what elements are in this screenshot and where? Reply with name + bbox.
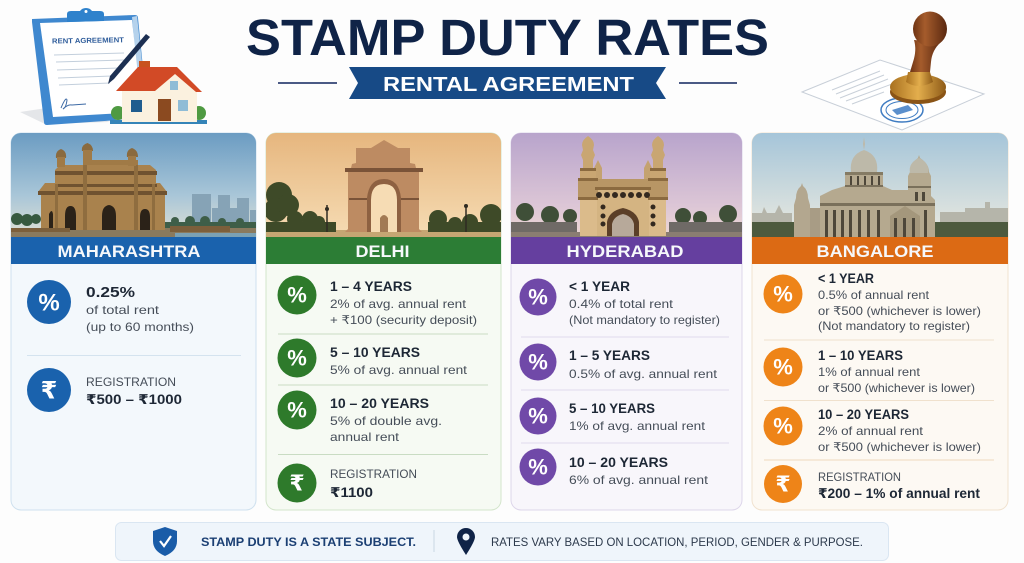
rate: 10 to 20 years: 10 – 20 YEARS	[569, 455, 668, 470]
illustration: rent agreement clipboard and house	[20, 8, 207, 125]
registration fee: Bangalore	[764, 465, 981, 503]
rate: 10 to 20 years	[520, 448, 709, 487]
panel: Hyderabad	[511, 133, 742, 510]
heading band: Delhi	[266, 237, 501, 264]
rate: 10 to 20 years: or ₹500 (whichever is lower)	[818, 440, 981, 454]
rate: 0.25% of total rent: of total rent	[86, 303, 160, 317]
rate: 1 to 10 years: 1 – 10 YEARS	[818, 348, 903, 363]
subtitle ribbon	[278, 67, 737, 99]
registration fee: Bangalore: REGISTRATION	[818, 470, 901, 484]
rate: under 1 year: < 1 YEAR	[818, 271, 874, 286]
rate: 1 to 4 years: 2% of avg. annual rent	[330, 297, 467, 311]
registration fee: Delhi: ₹1100	[330, 485, 373, 500]
rate: 10 to 20 years	[278, 390, 442, 444]
footer note bar	[116, 522, 888, 560]
rate: 1 to 4 years	[278, 276, 477, 327]
heading band: Hyderabad	[511, 237, 742, 264]
rate: 1 to 5 years: %	[528, 350, 548, 374]
rate: 1 to 5 years: 1 – 5 YEARS	[569, 348, 650, 363]
rate: 5 to 10 years: %	[287, 346, 307, 370]
rate: under 1 year: 0.5% of annual rent	[818, 288, 930, 302]
rate: 1 to 4 years: %	[287, 282, 307, 308]
rate: 5 to 10 years: 1% of avg. annual rent	[569, 419, 706, 433]
illustration: rent agreement clipboard and house: RENT AGREEMENT	[52, 35, 125, 45]
rate: 10 to 20 years: %	[528, 454, 548, 480]
rate: under 1 year: (Not mandatory to register)	[818, 319, 970, 333]
rate: under 1 year: (Not mandatory to register)	[569, 313, 720, 327]
rate: under 1 year: 0.4% of total rent	[569, 297, 674, 311]
rate: 5 to 10 years	[278, 338, 468, 378]
rate: 10 to 20 years: 2% of annual rent	[818, 424, 924, 438]
registration fee: Maharashtra: REGISTRATION	[86, 375, 176, 389]
photo: India Gate	[264, 133, 502, 237]
photo: domed palace	[752, 133, 1008, 237]
icon: location pin	[457, 528, 475, 555]
rate: 1 to 5 years: 0.5% of avg. annual rent	[569, 367, 718, 381]
rate: 10 to 20 years	[764, 406, 981, 454]
rate: 10 to 20 years: 10 – 20 YEARS	[818, 407, 909, 422]
subtitle ribbon: RENTAL AGREEMENT	[383, 73, 635, 96]
rate: 10 to 20 years: %	[287, 398, 307, 422]
heading band: Maharashtra	[11, 237, 256, 264]
rate: 5 to 10 years: 5 – 10 YEARS	[569, 401, 655, 416]
panel: Maharashtra	[11, 133, 256, 510]
rate: 1 to 10 years: 1% of annual rent	[818, 365, 921, 379]
registration fee: Bangalore: ₹	[775, 472, 791, 496]
heading band: Bangalore	[752, 237, 1008, 264]
photo: Charminar	[511, 133, 742, 237]
registration fee: Delhi: ₹	[289, 470, 305, 496]
rate: 0.25% of total rent: 0.25%	[86, 284, 135, 301]
rate: under 1 year: or ₹500 (whichever is lower)	[818, 304, 981, 318]
photo: Gateway of India	[11, 133, 256, 237]
rate: 10 to 20 years: 10 – 20 YEARS	[330, 396, 429, 411]
rate: 1 to 4 years: + ₹100 (security deposit)	[330, 313, 477, 327]
card background	[511, 133, 742, 510]
rate: 5 to 10 years: 5 – 10 YEARS	[330, 345, 420, 360]
rate: 1 to 4 years: 1 – 4 YEARS	[330, 279, 412, 294]
rate: 1 to 10 years: or ₹500 (whichever is lower)	[818, 381, 975, 395]
registration fee: Maharashtra	[27, 368, 182, 412]
rate: 10 to 20 years: 6% of avg. annual rent	[569, 473, 709, 487]
panel: Delhi	[264, 133, 502, 510]
rate: under 1 year: %	[773, 282, 793, 306]
registration fee: Delhi	[278, 464, 417, 502]
note: rates vary: RATES VARY BASED ON LOCATION, PERIOD, GENDER & PURPOSE.	[491, 537, 863, 549]
rate: under 1 year: %	[528, 284, 548, 310]
rate: 10 to 20 years: annual rent	[330, 430, 400, 444]
rate: 10 to 20 years: 5% of double avg.	[330, 414, 442, 428]
rate: 1 to 5 years	[520, 344, 718, 381]
heading band: Hyderabad: HYDERABAD	[566, 242, 684, 261]
rate: under 1 year	[764, 271, 981, 333]
rate: under 1 year	[520, 278, 720, 327]
rate: 1 to 10 years: %	[773, 354, 793, 380]
card background	[752, 133, 1008, 510]
card background	[11, 133, 256, 510]
heading band: Delhi: DELHI	[356, 242, 410, 261]
rate: under 1 year: < 1 YEAR	[569, 279, 630, 294]
rate: 5 to 10 years: %	[528, 404, 548, 428]
rate: 5 to 10 years	[520, 398, 706, 434]
illustration: wooden stamp on document	[802, 12, 984, 130]
rate: 10 to 20 years: %	[773, 414, 793, 438]
panel: Bangalore	[752, 133, 1008, 510]
note: state subject: STAMP DUTY IS A STATE SUBJECT.	[201, 537, 416, 549]
registration fee: Delhi: REGISTRATION	[330, 467, 417, 481]
rate: 0.25% of total rent: (up to 60 months)	[86, 320, 194, 334]
title: STAMP DUTY RATES	[246, 9, 769, 66]
card background	[266, 133, 501, 510]
rate: 5 to 10 years: 5% of avg. annual rent	[330, 363, 468, 377]
icon: shield with check	[153, 527, 177, 556]
registration fee: Maharashtra: ₹500 – ₹1000	[86, 392, 182, 407]
rate: 0.25% of total rent: %	[38, 290, 60, 316]
rate: 1 to 10 years	[764, 348, 975, 395]
registration fee: Bangalore: ₹200 – 1% of annual rent	[818, 486, 981, 501]
registration fee: Maharashtra: ₹	[41, 378, 57, 404]
heading band: Maharashtra: MAHARASHTRA	[58, 242, 200, 261]
rate: 0.25% of total rent	[27, 280, 194, 334]
heading band: Bangalore: BANGALORE	[816, 242, 934, 261]
